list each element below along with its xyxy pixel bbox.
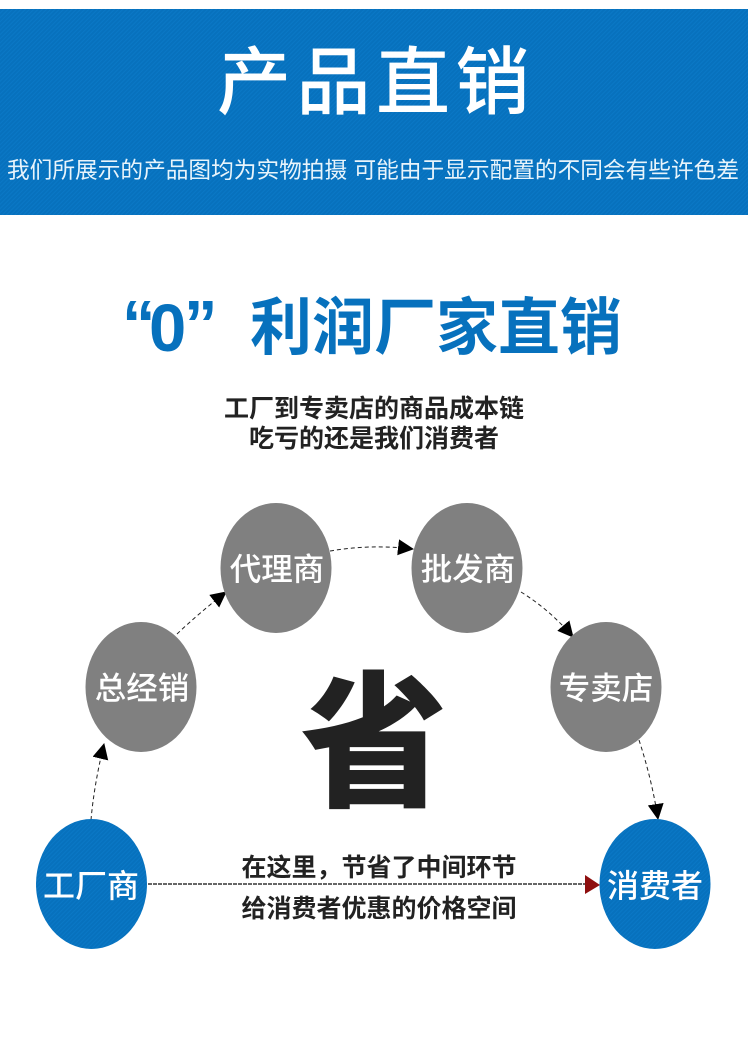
- text: supply chain subheading: [224, 395, 524, 453]
- arrow: factory direct to consumer: [148, 875, 600, 894]
- heading: zero profit factory direct: [122, 287, 622, 366]
- node: specialty store: [550, 622, 662, 752]
- node: wholesaler: [412, 503, 522, 633]
- text: savings message: 给消费者优惠的价格空间: [241, 895, 517, 923]
- heading: product direct sale: 产品直销: [217, 41, 535, 124]
- node: consumer: 消费者: [607, 868, 703, 904]
- arrow: store to consumer: [639, 740, 658, 819]
- arrow: factory to general distributor: [91, 744, 104, 820]
- arrow: general distributor to agent: [177, 592, 226, 634]
- node: factory: [36, 819, 147, 949]
- node: consumer: [600, 819, 710, 949]
- text: photo disclaimer: 我们所展示的产品图均为实物拍摄 可能由于显示配置的不同会有些许色差: [7, 157, 739, 183]
- text: savings message: [241, 854, 517, 923]
- text: supply chain subheading: 吃亏的还是我们消费者: [249, 425, 499, 453]
- heading: zero profit factory direct: “0”: [122, 287, 218, 366]
- node: factory: 工厂商: [43, 868, 139, 904]
- big character: save: 省: [300, 663, 448, 827]
- arrow: agent to wholesaler: [330, 547, 413, 551]
- arrow: wholesaler to store: [521, 592, 573, 637]
- node: agent: [220, 503, 332, 633]
- node: agent: 代理商: [230, 551, 324, 587]
- node: wholesaler: 批发商: [421, 551, 515, 587]
- node: general distributor: 总经销: [95, 670, 189, 706]
- node: specialty store: 专卖店: [559, 670, 653, 706]
- heading: zero profit factory direct: 利润厂家直销: [250, 294, 622, 363]
- node: general distributor: [86, 622, 196, 752]
- text: savings message: 在这里，节省了中间环节: [241, 854, 517, 882]
- text: supply chain subheading: 工厂到专卖店的商品成本链: [224, 395, 524, 423]
- panel: blue header band: [0, 9, 748, 215]
